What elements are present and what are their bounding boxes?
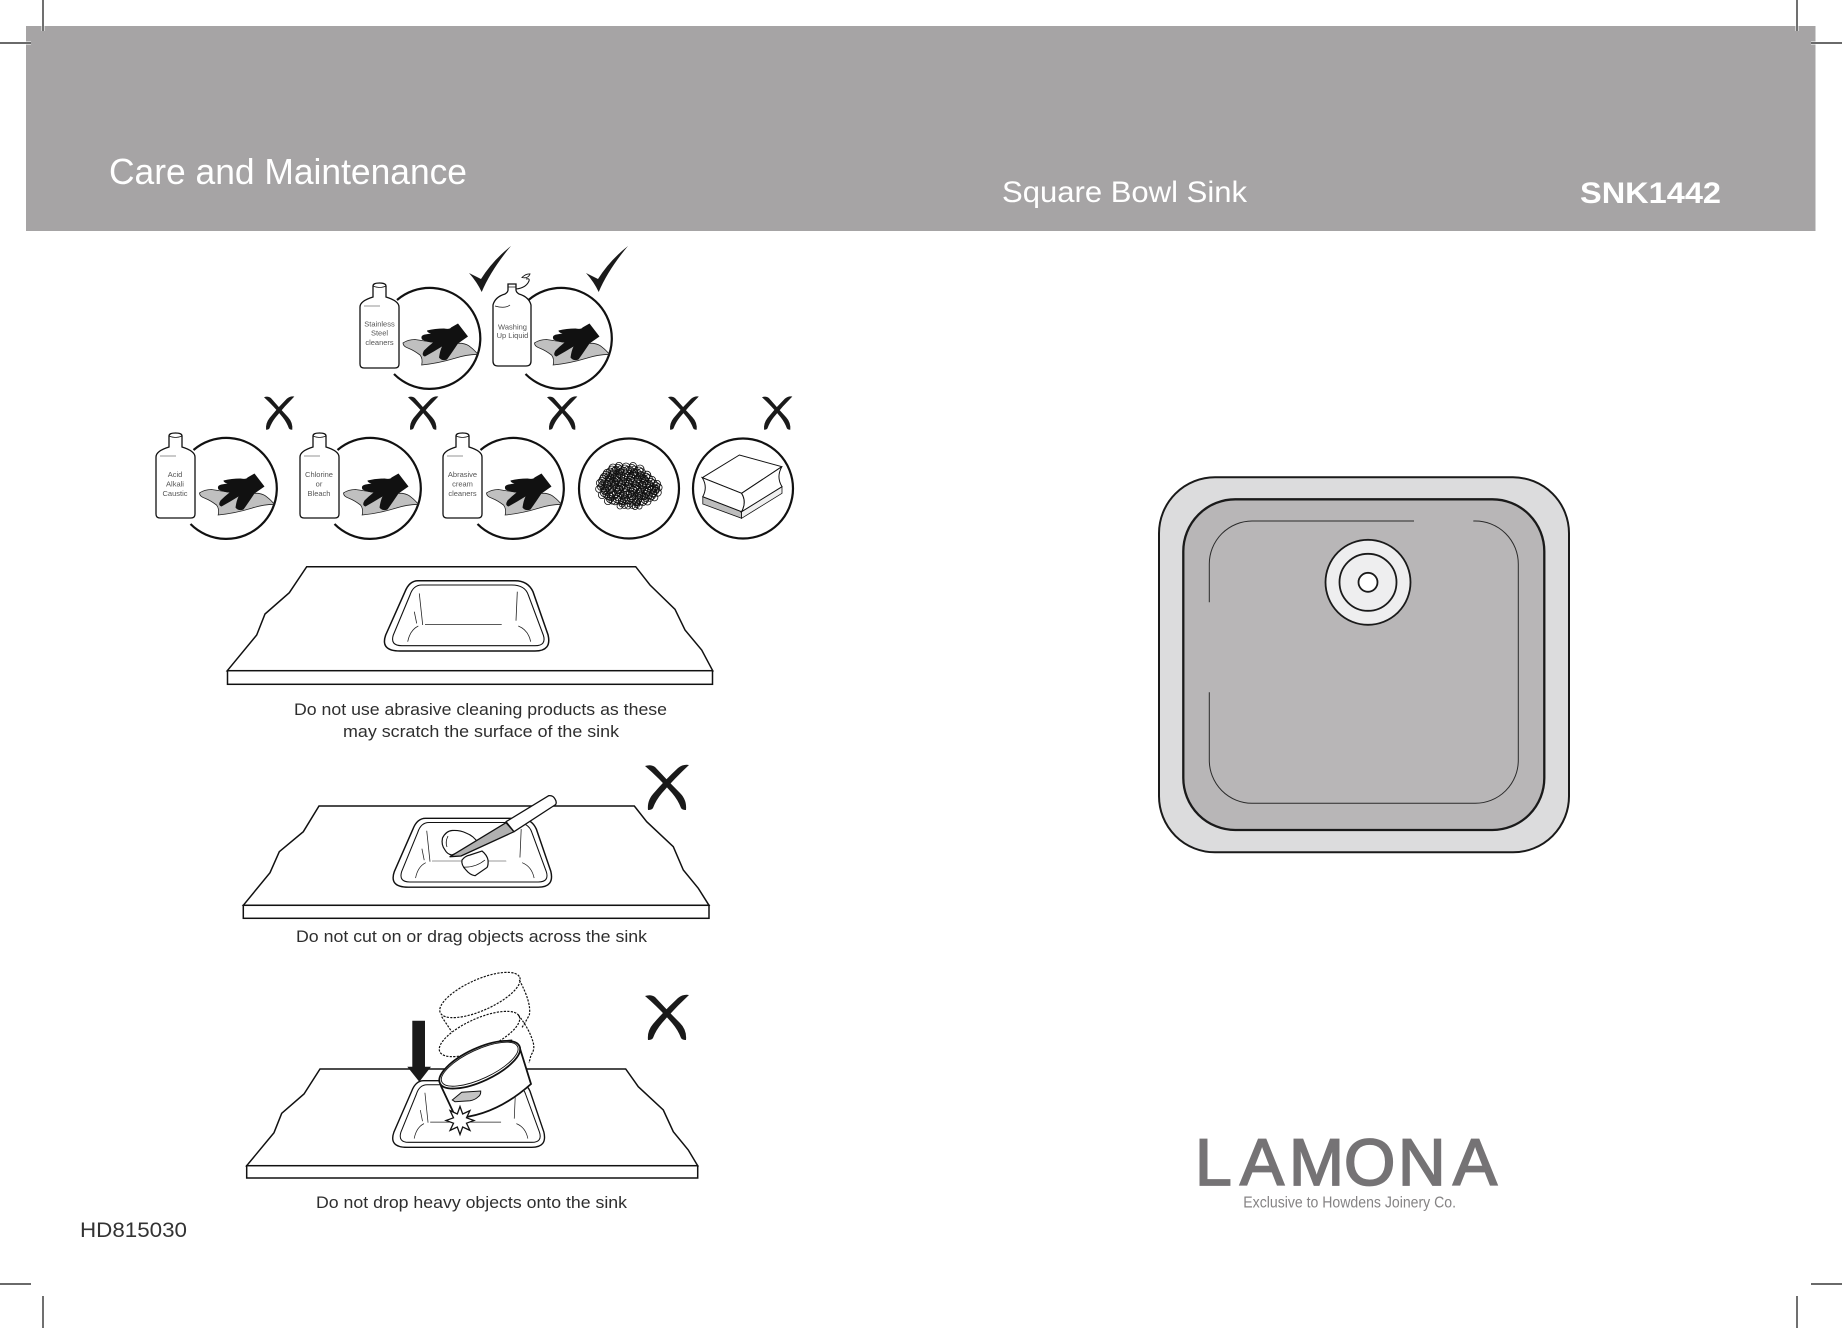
acid alkali caustic wipe: Acid	[168, 470, 182, 479]
stainless steel cleaner wipe: cleaners	[365, 338, 394, 347]
cross	[264, 396, 294, 430]
abrasive cream cleaners wipe: cleaners	[448, 489, 477, 498]
steel wool icon	[579, 438, 679, 538]
scene: worktop and sink, abrasive products	[227, 567, 713, 684]
header band	[26, 26, 1816, 231]
caption: abrasive products: Do not use abrasive cleaning products as these	[294, 700, 667, 719]
recommended cleaners row	[360, 246, 628, 389]
prohibited cleaners row	[156, 396, 793, 539]
cross	[762, 396, 792, 430]
cross	[645, 995, 689, 1040]
cross	[547, 396, 577, 430]
caption: cutting: Do not cut on or drag objects across the sink	[296, 927, 648, 946]
stainless steel cleaner wipe: Steel	[371, 328, 388, 338]
logo tagline: Exclusive to Howdens Joinery Co.	[1243, 1194, 1456, 1211]
chlorine or bleach wipe: Bleach	[308, 489, 330, 498]
scouring pad icon	[693, 438, 793, 538]
down arrow	[407, 1021, 431, 1082]
drain	[1326, 540, 1410, 625]
stainless steel cleaner wipe: Stainless	[364, 320, 395, 328]
chlorine or bleach wipe: Chlorine	[305, 470, 333, 479]
acid alkali caustic wipe	[156, 433, 277, 539]
washing up liquid wipe	[493, 274, 612, 389]
washing up liquid wipe: Up Liquid	[497, 331, 528, 340]
document code: HD815030	[80, 1219, 187, 1242]
cross	[668, 396, 699, 430]
abrasive cream cleaners wipe: Abrasive	[448, 470, 477, 479]
scene: heavy pan dropped on sink	[247, 963, 698, 1178]
heading: care and maintenance: Care and Maintenance	[109, 151, 467, 192]
abrasive cream cleaners wipe: cream	[452, 480, 473, 488]
falling pan	[433, 1031, 531, 1118]
caption: abrasive products: may scratch the surface of the sink	[343, 722, 620, 741]
sink plan view	[1159, 477, 1569, 852]
stainless steel cleaner wipe	[360, 283, 480, 389]
ghost pans	[433, 963, 534, 1066]
acid alkali caustic wipe: Alkali	[166, 480, 184, 488]
product code: SNK1442	[1580, 177, 1721, 210]
abrasive cream cleaners wipe	[443, 433, 564, 539]
caption: dropping: Do not drop heavy objects onto the sink	[316, 1193, 628, 1212]
knife	[450, 796, 556, 857]
cross	[408, 396, 438, 430]
chlorine or bleach wipe	[300, 433, 421, 539]
product name: Square Bowl Sink	[1002, 176, 1248, 209]
cross	[645, 765, 689, 810]
tick	[469, 246, 511, 292]
logo: Lamona: LAMONA	[1195, 1125, 1497, 1199]
garlic pieces	[442, 830, 488, 876]
caption: abrasive products	[294, 700, 667, 741]
washing up liquid wipe: Washing	[498, 322, 527, 332]
chlorine or bleach wipe: or	[316, 480, 323, 488]
tick	[586, 246, 628, 292]
scene: knife cutting on sink	[243, 796, 709, 918]
impact star	[446, 1106, 474, 1134]
acid alkali caustic wipe: Caustic	[162, 489, 188, 498]
